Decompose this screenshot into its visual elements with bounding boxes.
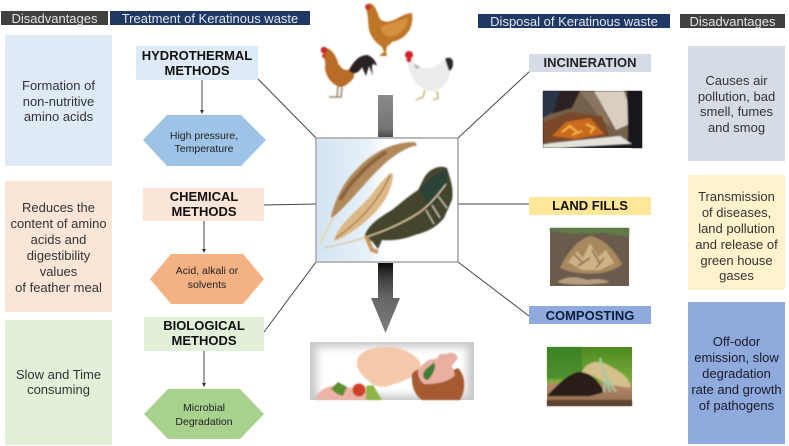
header: treatment of keratinous waste: Treatment of Keratinous waste xyxy=(122,11,298,26)
hexagon: microbial degradation xyxy=(144,389,264,439)
label: land fills: LAND FILLS xyxy=(552,198,628,213)
label: composting: COMPOSTING xyxy=(546,308,634,323)
panel: chemical disadvantage: of feather meal xyxy=(15,280,102,295)
method: hydrothermal: METHODS xyxy=(164,63,230,78)
arrow: biological to conditions xyxy=(202,351,206,387)
panel: incineration disadvantage: pollution, bad xyxy=(698,89,775,104)
panel: chemical disadvantage xyxy=(5,181,112,312)
header: disposal of keratinous waste: Disposal of Keratinous waste xyxy=(490,14,658,29)
panel: land fills disadvantage: land pollution xyxy=(698,221,775,236)
hexagon: high pressure, temperature xyxy=(143,115,266,166)
panel: hydrothermal disadvantage: amino acids xyxy=(24,109,94,124)
panel: biological disadvantage: consuming xyxy=(27,382,90,397)
panel: chemical disadvantage: Reduces the xyxy=(22,200,95,215)
hexagon: acid, alkali or solvents: Acid, alkali or xyxy=(176,265,239,277)
label: composting xyxy=(529,306,651,324)
panel: hydrothermal disadvantage: non-nutritive xyxy=(23,94,94,109)
arrow: hydrothermal to conditions xyxy=(200,80,204,114)
arrow: poultry to feathers xyxy=(378,95,393,137)
panel: land fills disadvantage: green house xyxy=(700,253,773,268)
arrow: chemical to conditions xyxy=(202,221,206,253)
panel: incineration disadvantage: and smog xyxy=(708,120,765,135)
panel: hydrothermal disadvantage: Formation of xyxy=(22,78,95,93)
header: right disadvantages: Disadvantages xyxy=(690,14,776,29)
hexagon: high pressure, temperature: High pressure, xyxy=(170,130,238,142)
method: hydrothermal xyxy=(136,46,258,80)
hexagon: microbial degradation: Degradation xyxy=(175,416,233,428)
panel: incineration disadvantage: smell, fumes xyxy=(700,104,773,119)
connector: hydrothermal to feathers xyxy=(258,79,316,138)
panel: composting disadvantage: emission, slow xyxy=(694,350,779,365)
panel: biological disadvantage xyxy=(5,320,112,445)
panel: land fills disadvantage xyxy=(688,175,785,290)
panel: land fills disadvantage: Transmission xyxy=(698,189,775,204)
connector: composting to feathers xyxy=(458,262,529,316)
panel: chemical disadvantage: acids and xyxy=(31,232,86,247)
image: land fills xyxy=(550,228,629,286)
hexagon: acid, alkali or solvents xyxy=(150,254,264,304)
panel: incineration disadvantage xyxy=(688,46,785,161)
panel: chemical disadvantage: content of amino xyxy=(10,216,107,231)
label: incineration xyxy=(529,54,651,72)
connector: land fills to feathers xyxy=(458,203,529,205)
hexagon: high pressure, temperature: Temperature xyxy=(175,143,234,155)
label: incineration: INCINERATION xyxy=(544,55,636,70)
panel: incineration disadvantage: Causes air xyxy=(705,73,768,88)
method: chemical xyxy=(143,188,264,221)
icon: rooster xyxy=(321,47,377,97)
method: biological: BIOLOGICAL xyxy=(163,318,245,333)
icon: white hen xyxy=(405,51,453,100)
image: composting xyxy=(547,347,632,406)
connector: biological to feathers xyxy=(264,262,316,332)
connector: chemical to feathers xyxy=(264,204,316,205)
panel: composting disadvantage: of pathogens xyxy=(699,398,775,413)
method: biological: METHODS xyxy=(172,333,237,348)
method: chemical: CHEMICAL xyxy=(170,189,238,204)
icon: brown hen xyxy=(365,4,412,56)
panel: composting disadvantage: degradation xyxy=(702,366,771,381)
arrow: feathers to meat products xyxy=(371,263,400,333)
image: feathers xyxy=(316,138,458,262)
connector: incineration to feathers xyxy=(458,71,530,138)
image: poultry meat products xyxy=(310,342,474,400)
panel: composting disadvantage: rate and growth xyxy=(691,382,782,397)
method: hydrothermal: HYDROTHERMAL xyxy=(142,48,252,63)
hexagon: microbial degradation: Microbial xyxy=(183,402,225,414)
panel: land fills disadvantage: and release of xyxy=(695,237,778,252)
panel: chemical disadvantage: values xyxy=(40,264,78,279)
panel: chemical disadvantage: digestibility xyxy=(27,248,91,263)
image: incineration xyxy=(543,91,642,148)
panel: land fills disadvantage: gases xyxy=(719,268,754,283)
label: land fills xyxy=(529,197,651,215)
header: left disadvantages: Disadvantages xyxy=(12,11,98,26)
panel: composting disadvantage: Off-odor xyxy=(713,334,761,349)
panel: hydrothermal disadvantage xyxy=(5,35,112,166)
method: biological xyxy=(144,317,264,351)
panel: land fills disadvantage: of diseases, xyxy=(702,205,771,220)
method: chemical: METHODS xyxy=(172,204,237,219)
hexagon: acid, alkali or solvents: solvents xyxy=(188,279,226,291)
panel: composting disadvantage xyxy=(688,302,785,444)
panel: biological disadvantage: Slow and Time xyxy=(16,367,101,382)
